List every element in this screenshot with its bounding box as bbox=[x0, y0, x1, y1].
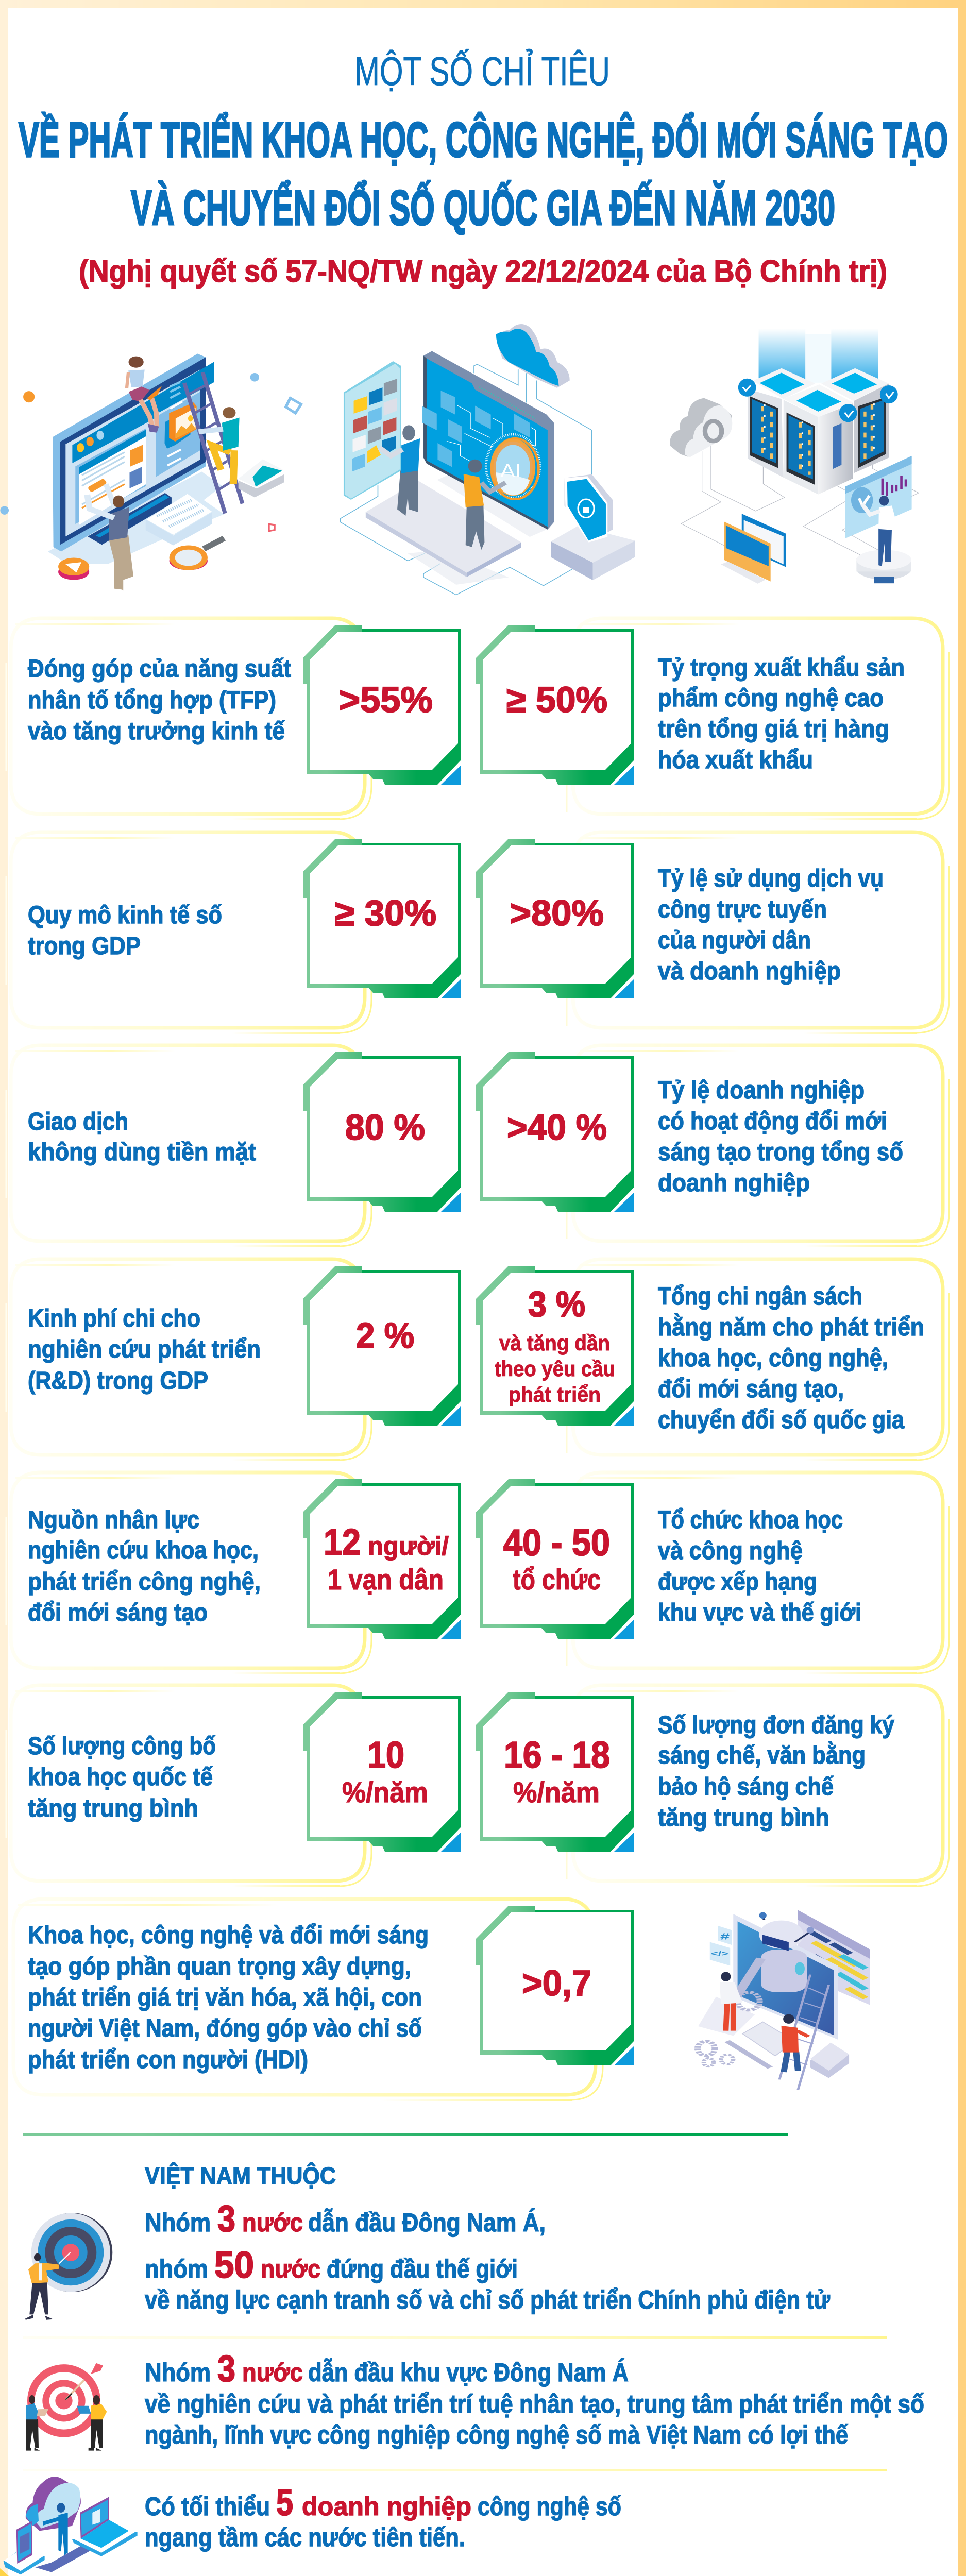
text: AI top 3: ngành, lĩnh vực công nghiệp công nghệ số mà Việt Nam có lợi thế bbox=[145, 2420, 848, 2449]
footer band bbox=[0, 2568, 966, 2576]
subtitle: (Nghị quyết số 57-NQ/TW ngày 22/12/2024 của Bộ Chính trị) bbox=[79, 254, 887, 289]
section: Việt Nam thuộc bbox=[4, 2162, 924, 2574]
icon: dart target with two people bbox=[26, 2363, 107, 2451]
value box: ≥ 50%: ≥ 50% bbox=[506, 680, 607, 720]
text: organisations: khu vực và thế giới bbox=[658, 1599, 861, 1626]
value box: >40 % bbox=[476, 1052, 634, 1212]
value box: >55%: >55% bbox=[339, 680, 433, 720]
card: TFP left bbox=[6, 618, 371, 820]
value box: 12 người: người/ bbox=[368, 1532, 449, 1561]
text: export share: phẩm công nghệ cao bbox=[658, 685, 884, 712]
text: online public services: Tỷ lệ sử dụng dịch vụ bbox=[658, 865, 884, 892]
green divider bbox=[23, 2133, 788, 2136]
text: digital economy: Quy mô kinh tế số bbox=[28, 902, 222, 929]
text: five enterprises: công nghệ số bbox=[478, 2492, 621, 2521]
text: HDI: phát triển giá trị văn hóa, xã hội, con bbox=[28, 1984, 422, 2011]
value box: 3 %: phát triển bbox=[509, 1382, 601, 1406]
card: researchers bbox=[6, 1472, 371, 1674]
card: budget bbox=[567, 1259, 949, 1461]
yellow divider bbox=[23, 2336, 887, 2339]
text: top 3 and top 50: nước bbox=[261, 2255, 320, 2283]
value box: 2 % bbox=[303, 1266, 461, 1426]
value box: 16 - 18 %/năm: %/năm bbox=[513, 1776, 600, 1808]
value box: 40 - 50: tổ chức bbox=[513, 1563, 601, 1596]
text: cashless bbox=[28, 1108, 256, 1166]
value box: >55% bbox=[303, 625, 461, 785]
card: export right bbox=[567, 618, 949, 820]
text: innovation enterprises: doanh nghiệp bbox=[658, 1170, 810, 1197]
row 3 bbox=[6, 1045, 949, 1247]
text: publications: khoa học quốc tế bbox=[28, 1764, 213, 1791]
title line 1: MỘT SỐ CHỈ TIÊU bbox=[354, 48, 610, 94]
text: AI top 3: dẫn đầu khu vực Đông Nam Á bbox=[308, 2358, 629, 2387]
value box: 2 %: 2 % bbox=[356, 1315, 414, 1355]
card: patents bbox=[567, 1685, 949, 1887]
value box: 10 %/năm: 10 bbox=[367, 1735, 404, 1776]
illustration: AI screen with cloud and shield: AI bbox=[500, 461, 521, 481]
value box: ≥ 30%: ≥ 30% bbox=[335, 893, 436, 933]
card: publications bbox=[6, 1685, 371, 1887]
illustration: robot and engineers: # bbox=[720, 1931, 730, 1941]
illustration: robot and engineers bbox=[698, 1910, 870, 2090]
value box: ≥ 50% bbox=[476, 625, 634, 785]
value box: 10 %/năm: %/năm bbox=[342, 1776, 428, 1808]
text: patents: Số lượng đơn đăng ký bbox=[658, 1711, 894, 1739]
text: five enterprises: 5 bbox=[276, 2482, 293, 2523]
text: five enterprises: doanh nghiệp bbox=[302, 2492, 471, 2521]
text: R&D: nghiên cứu phát triển bbox=[28, 1336, 261, 1363]
value box: >0,7: >0,7 bbox=[522, 1963, 591, 2003]
text: organisations bbox=[658, 1506, 861, 1626]
text: R&D: Kinh phí chi cho bbox=[28, 1305, 200, 1332]
text: export share: hóa xuất khẩu bbox=[658, 747, 813, 774]
row 7 bbox=[13, 1899, 870, 2101]
text: patents: tăng trung bình bbox=[658, 1804, 829, 1832]
text: TFP: vào tăng trưởng kinh tế bbox=[28, 718, 285, 745]
value box: 3 %: 3 % bbox=[528, 1284, 585, 1324]
value box: 10 %/năm bbox=[303, 1692, 461, 1852]
text: researchers: phát triển công nghệ, bbox=[28, 1568, 261, 1596]
text: annual budget: khoa học, công nghệ, bbox=[658, 1345, 888, 1372]
text: AI top 3 bbox=[145, 2348, 924, 2449]
text: innovation enterprises: sáng tạo trong tổng số bbox=[658, 1139, 903, 1166]
text: online public services: và doanh nghiệp bbox=[658, 958, 841, 985]
text: export share: trên tổng giá trị hàng bbox=[658, 716, 889, 743]
text: top 3 and top 50: dẫn đầu Đông Nam Á, bbox=[308, 2208, 546, 2237]
card: online services bbox=[567, 832, 949, 1034]
value box: 12 người: 1 vạn dân bbox=[328, 1563, 444, 1596]
text: annual budget bbox=[658, 1283, 924, 1434]
text: AI top 3: Nhóm bbox=[145, 2358, 211, 2387]
yellow divider bbox=[23, 2469, 887, 2471]
card: organisations bbox=[567, 1472, 949, 1674]
icon: target with presenter bbox=[25, 2213, 112, 2320]
text: online public services bbox=[658, 865, 884, 985]
row 6 bbox=[6, 1685, 949, 1887]
text: publications bbox=[28, 1733, 216, 1822]
value box: 3 % bbox=[476, 1266, 634, 1426]
text: cashless: Giao dịch bbox=[28, 1108, 128, 1136]
illustration: robot and engineers: </> bbox=[711, 1950, 728, 1958]
text: patents: bảo hộ sáng chế bbox=[658, 1773, 834, 1801]
text: annual budget: hằng năm cho phát triển bbox=[658, 1313, 924, 1341]
text: innovation enterprises: có hoạt động đổi mới bbox=[658, 1108, 887, 1135]
row 1 bbox=[6, 618, 949, 820]
value box: >0,7 bbox=[476, 1906, 634, 2065]
text: R&D: (R&D) trong GDP bbox=[28, 1367, 208, 1395]
value box: >80%: >80% bbox=[510, 893, 604, 933]
text: cashless: không dùng tiền mặt bbox=[28, 1139, 256, 1166]
text: HDI: Khoa học, công nghệ và đổi mới sáng bbox=[28, 1922, 429, 1949]
text: top 3 and top 50: nước bbox=[242, 2208, 303, 2237]
text: top 3 and top 50: Nhóm bbox=[145, 2208, 211, 2237]
heading: VIỆT NAM THUỘC bbox=[145, 2162, 336, 2189]
text: R&D bbox=[28, 1305, 261, 1395]
text: online public services: công trực tuyến bbox=[658, 896, 827, 923]
text: digital economy: trong GDP bbox=[28, 933, 141, 960]
illustration: website monitor with people bbox=[0, 353, 301, 592]
row 5 bbox=[6, 1472, 949, 1674]
row 2 bbox=[6, 832, 949, 1034]
text: AI top 3: 3 bbox=[217, 2348, 235, 2389]
illustration: data servers bbox=[670, 329, 919, 584]
text: five enterprises: Có tối thiểu bbox=[145, 2492, 270, 2521]
text: top 3 and top 50: về năng lực cạnh tranh số và chỉ số phát triển Chính phủ điện tử bbox=[145, 2285, 831, 2314]
value box: 40 - 50 bbox=[476, 1479, 634, 1639]
text: HDI: tạo góp phần quan trọng xây dựng, bbox=[28, 1953, 411, 1980]
text: HDI: phát triển con người (HDI) bbox=[28, 2046, 308, 2074]
icon: cloud, phone and laptop bbox=[4, 2477, 138, 2574]
text: publications: Số lượng công bố bbox=[28, 1733, 216, 1760]
text: export share bbox=[658, 654, 905, 774]
value box: 40 - 50: 40 - 50 bbox=[503, 1522, 610, 1564]
text: TFP: nhân tố tổng hợp (TFP) bbox=[28, 687, 276, 714]
text: top 3 and top 50: 50 bbox=[214, 2245, 254, 2286]
value box: 12 người bbox=[303, 1479, 461, 1639]
text: researchers bbox=[28, 1506, 261, 1626]
card: HDI bbox=[13, 1899, 603, 2101]
value box: 80 % bbox=[303, 1052, 461, 1212]
value box: 16 - 18 %/năm bbox=[476, 1692, 634, 1852]
card: R&D bbox=[6, 1259, 371, 1461]
text: organisations: và công nghệ bbox=[658, 1537, 803, 1565]
text: TFP: Đóng góp của năng suất bbox=[28, 655, 291, 683]
text: annual budget: đổi mới sáng tạo, bbox=[658, 1376, 844, 1403]
text: top 3 and top 50: đứng đầu thế giới bbox=[327, 2255, 518, 2283]
text: innovation enterprises: Tỷ lệ doanh nghiệp bbox=[658, 1077, 865, 1104]
text: five enterprises bbox=[145, 2482, 621, 2552]
value box: ≥ 30% bbox=[303, 839, 461, 998]
text: innovation enterprises bbox=[658, 1077, 903, 1197]
text: five enterprises: ngang tầm các nước tiên tiến. bbox=[145, 2523, 465, 2552]
text: researchers: nghiên cứu khoa học, bbox=[28, 1537, 259, 1564]
text: patents bbox=[658, 1711, 894, 1832]
text: organisations: được xếp hạng bbox=[658, 1568, 817, 1596]
value box: 3 %: và tăng dần bbox=[499, 1331, 610, 1355]
title block bbox=[19, 48, 948, 289]
text: online public services: của người dân bbox=[658, 927, 811, 954]
value box: >80% bbox=[476, 839, 634, 998]
value box: 3 %: theo yêu cầu bbox=[495, 1357, 615, 1381]
card: innovation enterprises bbox=[567, 1045, 949, 1247]
text: export share: Tỷ trọng xuất khẩu sản bbox=[658, 654, 905, 682]
text: patents: sáng chế, văn bằng bbox=[658, 1741, 866, 1769]
text: organisations: Tổ chức khoa học bbox=[658, 1506, 843, 1534]
text: publications: tăng trung bình bbox=[28, 1795, 198, 1822]
text: TFP bbox=[28, 655, 291, 745]
text: digital economy bbox=[28, 902, 222, 960]
text: top 3 and top 50: 3 bbox=[217, 2198, 235, 2240]
text: annual budget: chuyển đổi số quốc gia bbox=[658, 1406, 904, 1434]
value box: 16 - 18 %/năm: 16 - 18 bbox=[504, 1735, 610, 1776]
text: HDI bbox=[28, 1922, 429, 2074]
value box: 80 %: 80 % bbox=[345, 1107, 425, 1147]
illustration: AI screen with cloud and shield bbox=[341, 324, 635, 595]
text: top 3 and top 50 bbox=[145, 2198, 831, 2314]
card: cashless bbox=[6, 1045, 371, 1247]
text: AI top 3: nước bbox=[242, 2358, 303, 2387]
value box: >40 %: >40 % bbox=[507, 1107, 607, 1147]
row 4 bbox=[6, 1259, 949, 1461]
text: researchers: Nguồn nhân lực bbox=[28, 1506, 199, 1534]
text: annual budget: Tổng chi ngân sách bbox=[658, 1283, 862, 1310]
card: digital economy bbox=[6, 832, 371, 1034]
text: top 3 and top 50: nhóm bbox=[145, 2255, 208, 2283]
value box: 12 người: 12 bbox=[324, 1522, 361, 1563]
text: HDI: người Việt Nam, đóng góp vào chỉ số bbox=[28, 2015, 422, 2042]
text: researchers: đổi mới sáng tạo bbox=[28, 1599, 208, 1626]
